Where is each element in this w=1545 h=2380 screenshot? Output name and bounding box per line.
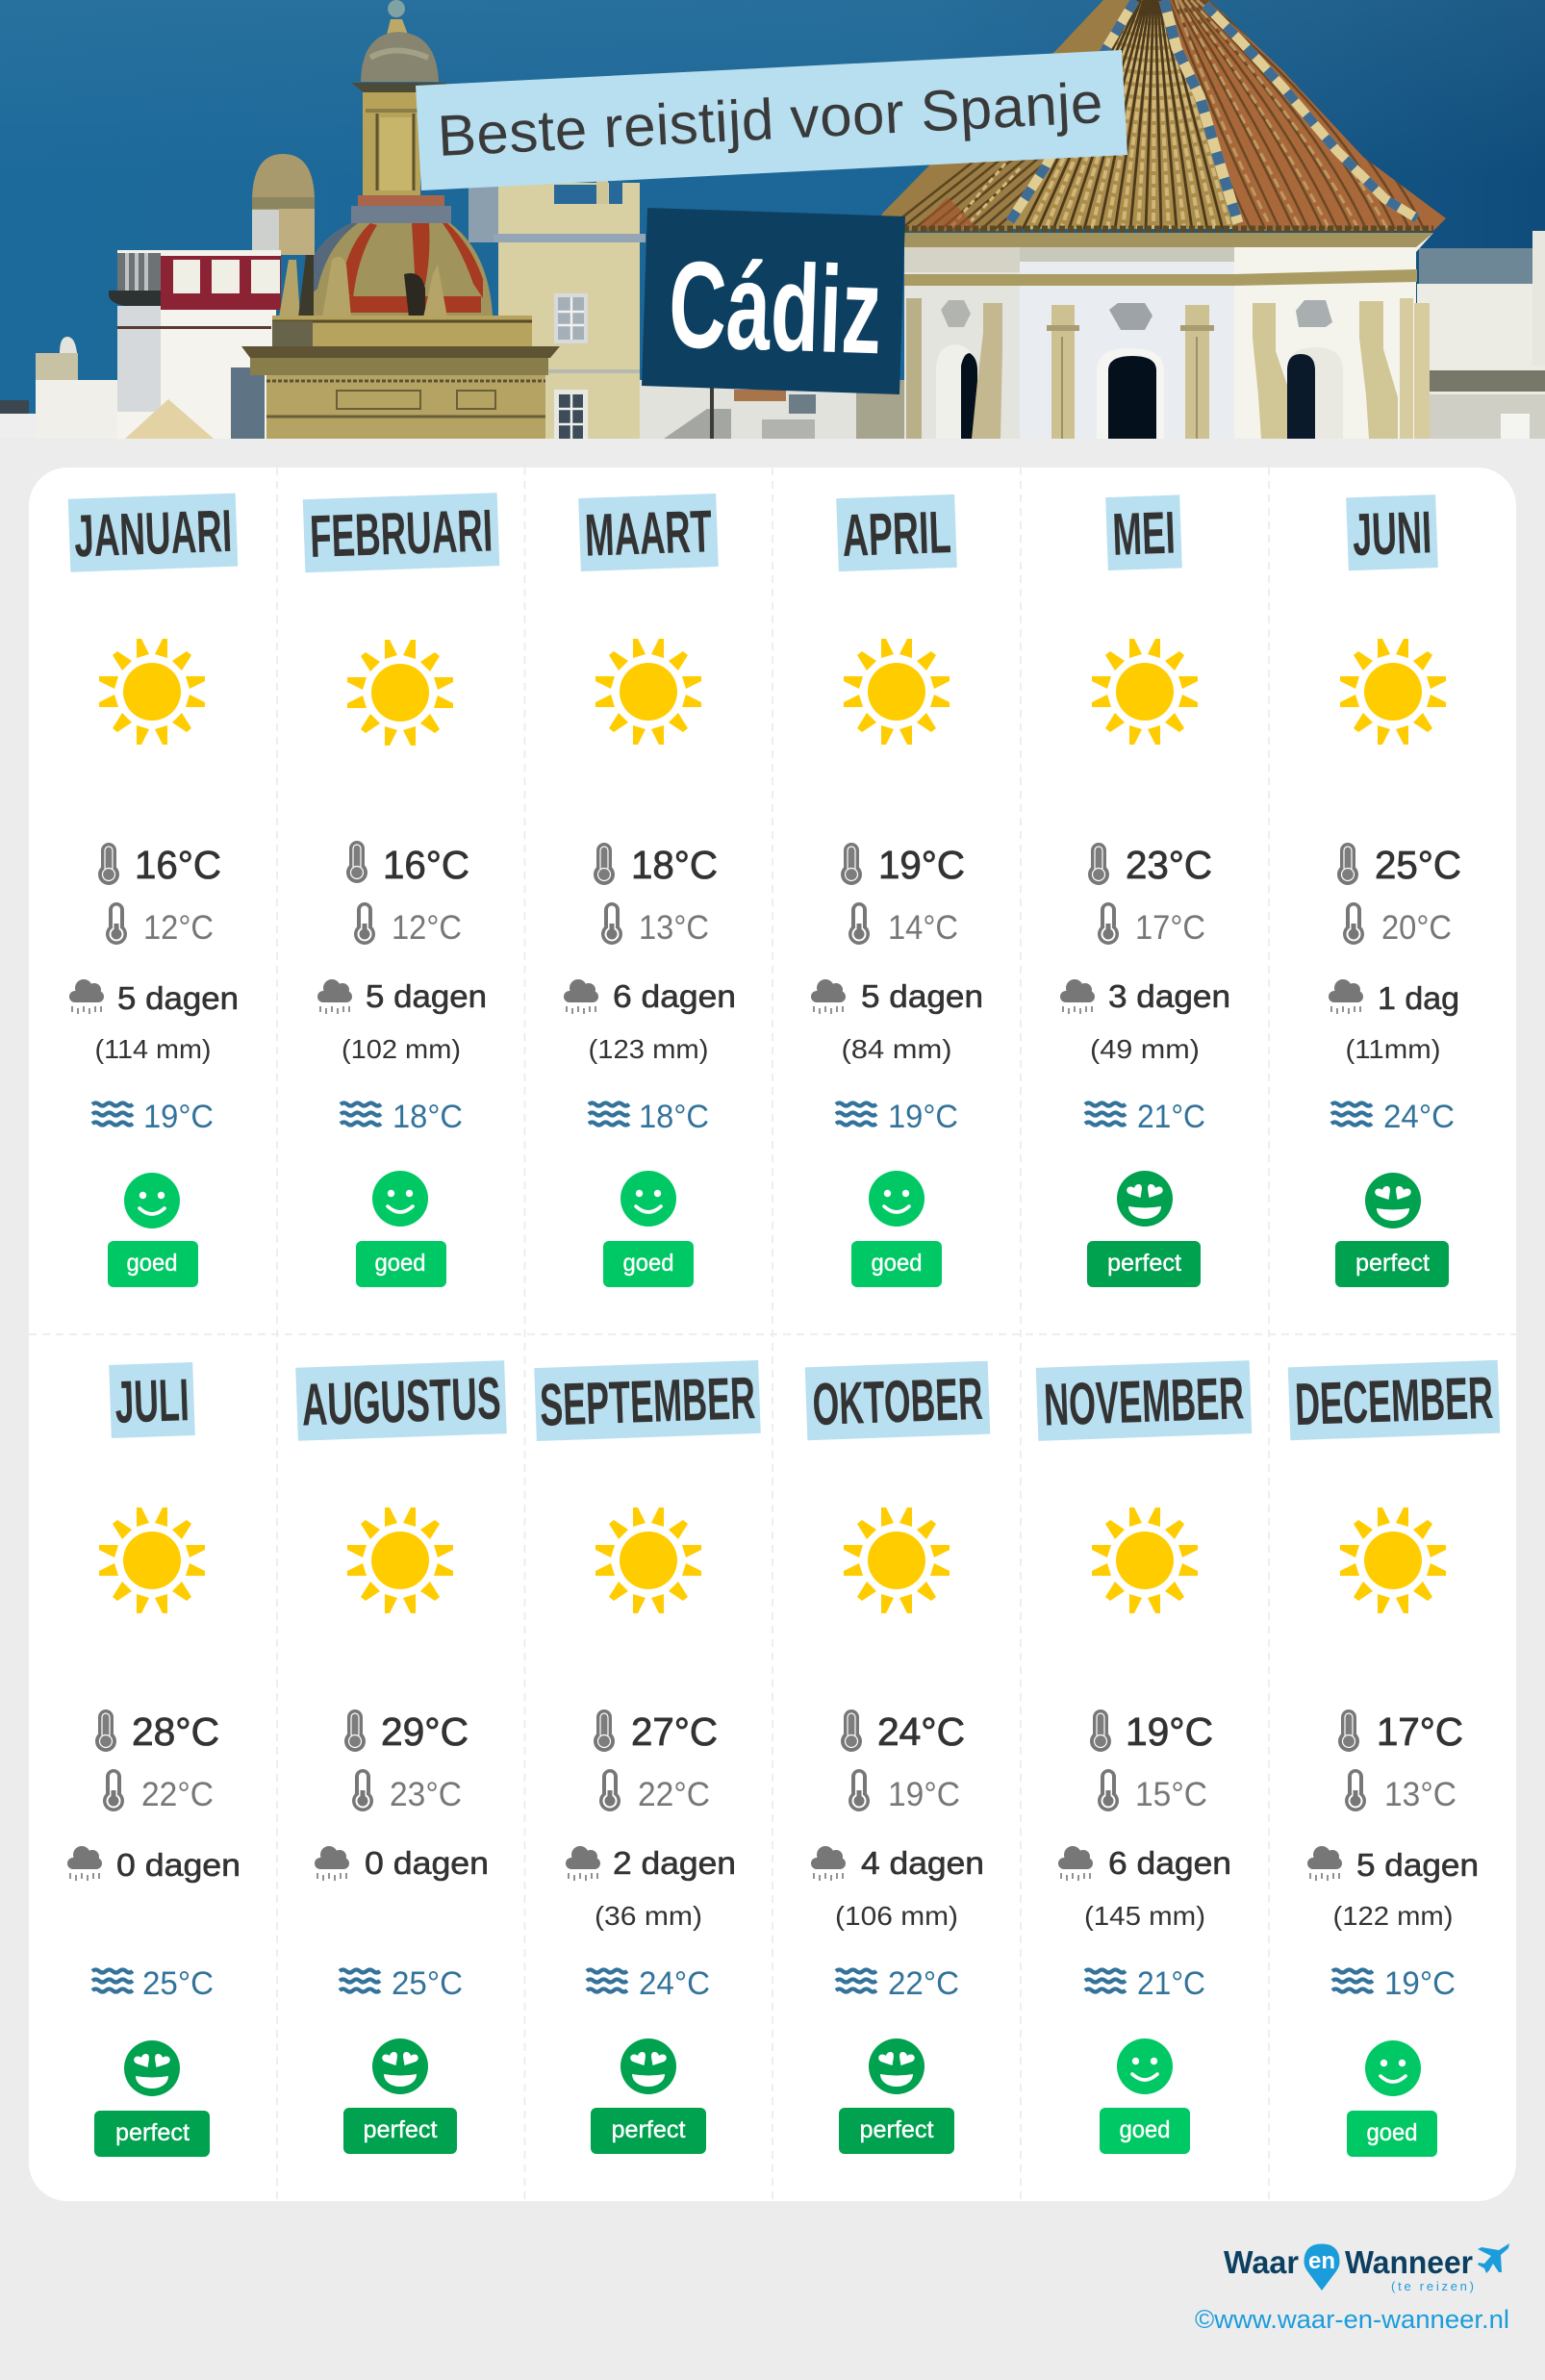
panel: oktober xyxy=(805,1361,990,2154)
sea temperature: 24°C xyxy=(1383,1099,1455,1135)
rating badge xyxy=(851,1241,942,1287)
rating badge: perfect xyxy=(115,2119,190,2146)
icon: sun xyxy=(595,1507,701,1613)
max temperature: 23°C xyxy=(1126,843,1212,887)
cream building xyxy=(469,183,502,242)
rainfall: (114 mm) xyxy=(94,1034,212,1064)
rain days xyxy=(811,978,983,1014)
min temperature xyxy=(1098,902,1205,947)
max temperature xyxy=(1337,843,1461,887)
panel: februari xyxy=(303,493,499,1287)
month label xyxy=(1036,1360,1252,1441)
rating face xyxy=(1117,1171,1173,1227)
max temperature: 19°C xyxy=(878,843,965,887)
min temperature: 22°C xyxy=(141,1776,214,1813)
max temperature xyxy=(594,843,718,887)
max temperature xyxy=(346,841,469,887)
rating badge xyxy=(1347,2111,1437,2157)
sea temperature: 25°C xyxy=(142,1965,214,2002)
icon: sun xyxy=(844,639,950,745)
panel: mei xyxy=(1060,494,1230,1287)
rain days: 5 dagen xyxy=(366,978,487,1014)
rain days xyxy=(1060,978,1230,1014)
rain days: 0 dagen xyxy=(365,1845,489,1881)
max temperature xyxy=(1088,843,1212,887)
rain days: 1 dag xyxy=(1378,980,1459,1016)
rain days: 2 dagen xyxy=(613,1845,736,1881)
sea temperature xyxy=(587,1965,710,2002)
sea temperature xyxy=(1332,1965,1456,2002)
sea temperature xyxy=(1331,1099,1455,1135)
rating face xyxy=(1117,2038,1173,2094)
sea temperature: 19°C xyxy=(888,1099,958,1135)
sea temperature xyxy=(589,1099,709,1135)
rating badge: goed xyxy=(1120,2116,1170,2143)
rainfall: (123 mm) xyxy=(589,1034,708,1064)
main building wall xyxy=(904,233,1433,439)
rating face xyxy=(1365,1173,1421,1228)
main card xyxy=(29,468,1516,2201)
rating badge xyxy=(839,2108,954,2154)
rating badge xyxy=(108,1241,198,1287)
rating badge xyxy=(94,2111,210,2157)
logo: Waar en Wanneer: Wanneer xyxy=(1345,2244,1473,2280)
panel: juli xyxy=(67,1362,241,2157)
rain days xyxy=(1307,1846,1479,1883)
month label: FEBRUARI xyxy=(309,497,494,570)
rating face xyxy=(124,2040,180,2096)
month label: JULI xyxy=(114,1367,190,1436)
rating badge: perfect xyxy=(860,2116,934,2143)
sea temperature: 25°C xyxy=(392,1965,463,2002)
tan roof xyxy=(125,399,214,439)
main roof xyxy=(877,0,1446,231)
rain days: 3 dagen xyxy=(1108,978,1230,1014)
min temperature xyxy=(106,902,214,947)
min temperature: 17°C xyxy=(1135,909,1205,947)
icon: sun xyxy=(99,639,205,745)
month label: SEPTEMBER xyxy=(539,1365,756,1439)
min temperature xyxy=(352,1769,462,1813)
icon: sun xyxy=(595,639,701,745)
icon: airplane xyxy=(1478,2243,1509,2273)
city name box xyxy=(642,208,905,394)
max temperature xyxy=(594,1709,718,1754)
min temperature xyxy=(848,1769,960,1813)
month label: MEI xyxy=(1111,500,1177,569)
panel: maart xyxy=(564,494,736,1287)
icon: sun xyxy=(1340,639,1446,745)
min temperature xyxy=(1098,1769,1207,1813)
rain days: 6 dagen xyxy=(613,978,736,1014)
sea temperature xyxy=(1085,1099,1205,1135)
month label xyxy=(836,494,957,571)
sea temperature: 19°C xyxy=(1384,1965,1456,2002)
panel: augustus xyxy=(295,1360,507,2154)
rating badge: goed xyxy=(872,1250,922,1277)
rating badge xyxy=(1087,1241,1201,1287)
rating face xyxy=(621,2038,676,2094)
sea temperature: 21°C xyxy=(1137,1965,1205,2002)
rating badge: goed xyxy=(127,1250,177,1277)
min temperature: 14°C xyxy=(888,909,958,947)
copyright: ©www.waar-en-wanneer.nl xyxy=(1195,2305,1509,2334)
logo: Waar en Wanneer: (te reizen) xyxy=(1391,2279,1474,2293)
rain days: 5 dagen xyxy=(117,980,239,1016)
rain days: 4 dagen xyxy=(861,1845,984,1881)
rain days xyxy=(1329,979,1459,1016)
rain days xyxy=(1058,1845,1231,1881)
min temperature xyxy=(599,1769,710,1813)
rainfall: (145 mm) xyxy=(1084,1901,1205,1931)
rainfall: (106 mm) xyxy=(835,1901,958,1931)
rating badge: goed xyxy=(1366,2119,1418,2146)
sea temperature xyxy=(340,1965,463,2002)
month label xyxy=(68,494,238,572)
month label: OKTOBER xyxy=(811,1366,984,1438)
rating badge: perfect xyxy=(612,2116,686,2143)
month label xyxy=(578,494,719,571)
sea temperature: 22°C xyxy=(888,1965,959,2002)
rain days: 5 dagen xyxy=(861,978,983,1014)
panel: juni xyxy=(1329,494,1461,1287)
icon: sun xyxy=(1092,1507,1198,1613)
month label: NOVEMBER xyxy=(1043,1365,1245,1439)
month label: JUNI xyxy=(1352,499,1432,569)
rainfall: (49 mm) xyxy=(1090,1034,1200,1064)
sea temperature xyxy=(1085,1965,1205,2002)
panel: november xyxy=(1036,1360,1252,2154)
rainfall: (36 mm) xyxy=(595,1901,702,1931)
max temperature: 17°C xyxy=(1377,1709,1463,1754)
max temperature: 25°C xyxy=(1375,843,1461,887)
icon: sun xyxy=(99,1507,205,1613)
red railing building xyxy=(117,250,281,256)
max temperature xyxy=(1338,1709,1463,1754)
max temperature: 19°C xyxy=(1126,1709,1213,1754)
month label xyxy=(805,1361,990,1440)
min temperature xyxy=(848,902,958,947)
max temperature xyxy=(841,843,965,887)
rain days: 0 dagen xyxy=(116,1847,241,1883)
rating badge xyxy=(603,1241,694,1287)
min temperature: 12°C xyxy=(143,909,214,947)
sea temperature xyxy=(836,1965,959,2002)
rainfall: (102 mm) xyxy=(342,1034,461,1064)
max temperature: 27°C xyxy=(631,1709,718,1754)
main dome tower xyxy=(241,0,560,439)
rating badge xyxy=(343,2108,457,2154)
rating badge: perfect xyxy=(364,2116,438,2143)
rating face xyxy=(372,1171,428,1227)
icon: sun xyxy=(844,1507,950,1613)
far buildings right xyxy=(1419,248,1545,296)
panel: september xyxy=(534,1360,761,2154)
sea temperature: 24°C xyxy=(639,1965,710,2002)
min temperature: 13°C xyxy=(639,909,709,947)
icon: sun xyxy=(347,640,453,746)
rain days: 6 dagen xyxy=(1108,1845,1231,1881)
icon: sun xyxy=(347,1507,453,1613)
white buildings left xyxy=(0,414,87,439)
max temperature: 16°C xyxy=(383,843,469,887)
min temperature: 15°C xyxy=(1135,1776,1207,1813)
hero photo: Cádiz rooftops and sea xyxy=(0,0,1545,439)
rating badge: goed xyxy=(375,1250,425,1277)
rain days: 5 dagen xyxy=(1356,1847,1479,1883)
min temperature: 12°C xyxy=(392,909,462,947)
max temperature: 18°C xyxy=(631,843,718,887)
max temperature: 24°C xyxy=(877,1709,965,1754)
rain days xyxy=(564,978,736,1014)
min temperature xyxy=(354,902,462,947)
small dome tower xyxy=(252,154,315,255)
rating face xyxy=(124,1173,180,1228)
month label xyxy=(295,1360,507,1441)
icon: map pin xyxy=(1304,2243,1339,2291)
month label xyxy=(303,493,499,572)
rating badge: perfect xyxy=(1107,1250,1181,1277)
panel: januari xyxy=(68,494,239,1287)
rainfall: (122 mm) xyxy=(1333,1901,1453,1931)
rating badge xyxy=(591,2108,706,2154)
city name box: Cádiz xyxy=(667,236,884,380)
rating face xyxy=(869,1171,924,1227)
panel: december xyxy=(1288,1360,1500,2157)
min temperature: 23°C xyxy=(390,1776,462,1813)
max temperature: 28°C xyxy=(132,1709,219,1754)
min temperature: 13°C xyxy=(1384,1776,1456,1813)
rating badge: perfect xyxy=(1355,1250,1430,1277)
rating face xyxy=(869,2038,924,2094)
rating badge xyxy=(1335,1241,1449,1287)
month label xyxy=(1105,494,1182,570)
rain days xyxy=(811,1845,984,1881)
icon: map pin: en xyxy=(1308,2248,1335,2274)
min temperature xyxy=(103,1769,214,1813)
rating badge xyxy=(356,1241,446,1287)
lower middle buildings xyxy=(640,380,904,439)
panel: april xyxy=(811,494,983,1287)
min temperature: 19°C xyxy=(888,1776,960,1813)
rating face xyxy=(621,1171,676,1227)
rain days xyxy=(67,1846,241,1883)
sea temperature xyxy=(92,1965,214,2002)
sea temperature xyxy=(341,1099,463,1135)
max temperature xyxy=(98,843,221,887)
rating badge: goed xyxy=(623,1250,673,1277)
rating badge xyxy=(1100,2108,1190,2154)
min temperature xyxy=(1343,902,1452,947)
rainfall: (11mm) xyxy=(1345,1034,1441,1064)
month label: AUGUSTUS xyxy=(300,1365,502,1439)
max temperature: 16°C xyxy=(135,843,221,887)
title banner xyxy=(416,50,1127,190)
rating face xyxy=(1365,2040,1421,2096)
min temperature xyxy=(601,902,709,947)
sea temperature xyxy=(836,1099,958,1135)
min temperature: 22°C xyxy=(638,1776,710,1813)
month label: APRIL xyxy=(841,499,952,570)
rain days xyxy=(317,978,487,1014)
month label: MAART xyxy=(584,498,713,570)
sea temperature xyxy=(92,1099,214,1135)
sea temperature: 18°C xyxy=(393,1099,463,1135)
sea temperature: 18°C xyxy=(639,1099,709,1135)
icon: sun xyxy=(1092,639,1198,745)
min temperature: 20°C xyxy=(1381,909,1452,947)
rain days xyxy=(566,1845,736,1881)
rainfall: (84 mm) xyxy=(841,1034,952,1064)
min temperature xyxy=(1345,1769,1456,1813)
title banner: Beste reistijd voor Spanje xyxy=(436,70,1104,168)
month label xyxy=(1346,494,1438,570)
month label xyxy=(534,1360,761,1441)
sea temperature: 21°C xyxy=(1137,1099,1205,1135)
rain days xyxy=(69,979,239,1016)
month label: JANUARI xyxy=(73,498,233,570)
max temperature: 29°C xyxy=(381,1709,469,1754)
month label xyxy=(109,1362,195,1438)
sea temperature: 19°C xyxy=(143,1099,214,1135)
logo: Waar en Wanneer: Waar xyxy=(1224,2244,1299,2280)
logo: Waar en Wanneer xyxy=(1224,2243,1509,2293)
rain days xyxy=(315,1845,489,1881)
rating face xyxy=(372,2038,428,2094)
icon: sun xyxy=(1340,1507,1446,1613)
